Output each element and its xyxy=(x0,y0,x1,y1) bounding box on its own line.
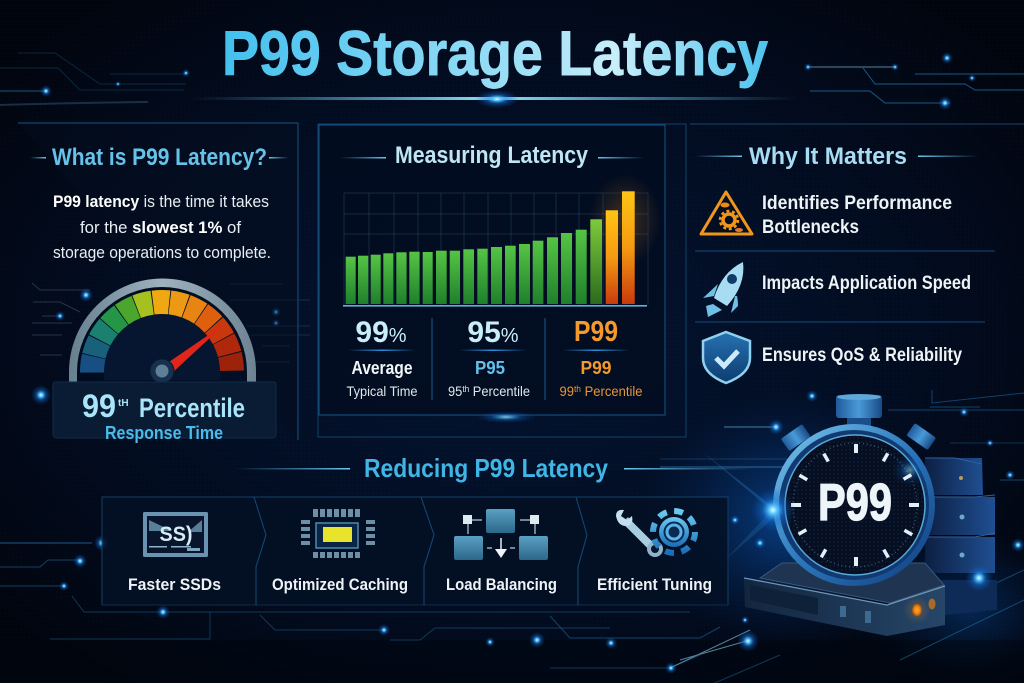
step: efficient tuning: Efficient Tuning xyxy=(597,575,712,594)
definition text: P99 latency is the time it takes xyxy=(53,192,269,211)
stat: P99: P99 xyxy=(574,316,618,348)
heading: why it matters: Why It Matters xyxy=(749,143,907,170)
lens flare xyxy=(700,450,795,560)
gauge plate: tH xyxy=(118,398,129,409)
stat: P95: Percentile xyxy=(469,383,530,399)
item text: QoS: Ensures QoS & Reliability xyxy=(762,345,962,366)
step: load balancing: Load Balancing xyxy=(446,575,557,594)
stat: P95: th xyxy=(462,384,469,394)
stat: average xyxy=(346,316,418,399)
gauge plate xyxy=(53,382,276,443)
gauge xyxy=(63,273,261,471)
dividers xyxy=(432,318,545,400)
item text: bottlenecks xyxy=(762,193,952,238)
stat: P95: 95% xyxy=(467,316,519,349)
stat: average: 99% xyxy=(355,316,407,349)
step: optimized caching: Optimized Caching xyxy=(272,575,408,594)
stat: P99: th xyxy=(574,384,581,394)
panel: what is P99 latency xyxy=(18,123,298,471)
item text: bottlenecks: Bottlenecks xyxy=(762,217,859,238)
stat: P95: P95 xyxy=(475,358,505,378)
heading: reducing: Reducing P99 Latency xyxy=(364,453,608,483)
panel: why it matters xyxy=(690,124,1024,383)
stat: P95 xyxy=(448,316,530,399)
gauge plate: Response Time xyxy=(105,423,223,443)
item text: bottlenecks: Identifies Performance xyxy=(762,193,952,214)
stat: P99: Percentile xyxy=(581,383,643,399)
gauge plate: Percentile xyxy=(139,393,245,423)
process strip xyxy=(102,497,728,605)
step: faster SSDs: SS) xyxy=(160,523,192,546)
stopwatch body xyxy=(773,394,936,586)
step: efficient tuning xyxy=(597,510,712,594)
stat: P95: 95 xyxy=(448,383,464,399)
section: reducing P99 latency xyxy=(102,453,754,605)
item text: application speed: Impacts Application Speed xyxy=(762,273,971,294)
definition text: for the slowest 1% of xyxy=(80,218,241,237)
step: load balancing xyxy=(446,509,557,594)
definition text: storage operations to complete. xyxy=(53,243,271,262)
stat: P99: P99 xyxy=(580,358,612,378)
server base xyxy=(744,563,945,636)
illustration: stopwatch on server xyxy=(700,394,997,636)
stopwatch body: P99 xyxy=(818,474,892,532)
heading: what is P99 latency: What is P99 Latency? xyxy=(52,144,267,171)
stat: average: Typical Time xyxy=(346,383,418,399)
icon: warning gear xyxy=(701,192,752,234)
panel: measuring latency xyxy=(318,124,686,437)
stat: P99: 99 xyxy=(560,383,575,399)
heading: measuring latency: Measuring Latency xyxy=(395,142,589,169)
bar chart xyxy=(343,174,661,307)
icon: rocket xyxy=(703,262,743,317)
step: faster SSDs xyxy=(128,512,221,594)
step: faster SSDs: Faster SSDs xyxy=(128,575,221,594)
gauge needle xyxy=(166,323,226,374)
stat: average: Average xyxy=(352,358,412,378)
stat: P99 xyxy=(560,316,643,399)
server stack xyxy=(925,458,997,615)
gauge plate: 99 xyxy=(82,388,116,424)
definition text xyxy=(53,192,271,262)
title: P99 Storage Latency xyxy=(222,19,768,89)
step: optimized caching xyxy=(272,509,408,594)
icon: shield xyxy=(703,332,750,383)
